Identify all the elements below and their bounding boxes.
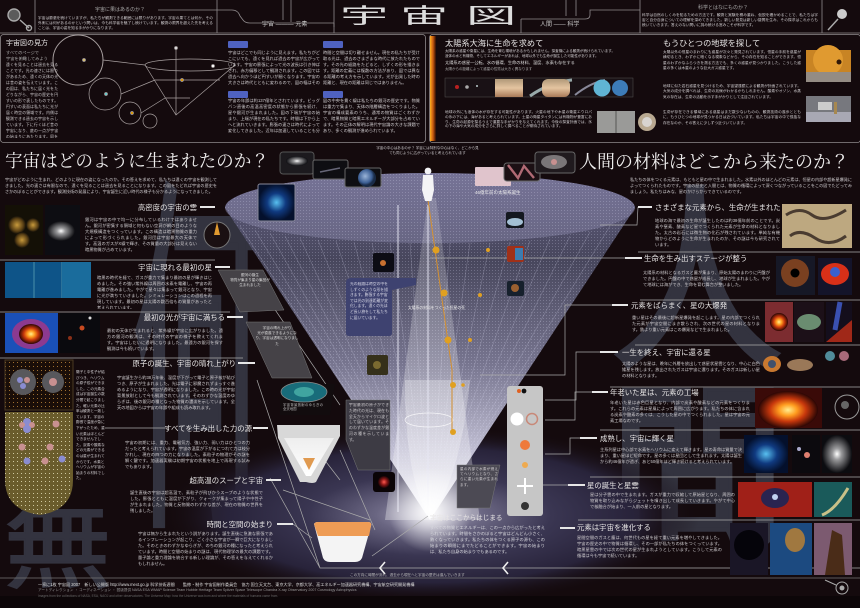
exoplanet images [806,45,851,122]
light path of orange galaxies [428,200,490,435]
particle diagram side text: 陽子と中性子が結びつき、ヘリウムの原子核ができました。この元素合成は宇宙誕生の数分間で起こりました。軽い元素の比率は観測と一致しています。宇宙の膨張で温度が急に下がったため、重い元素はほとんどできませんでした。炭素や酸素などの元素ができるのは星が生まれてからです。水素とヘリウムが宇宙の始まりの材料でした。 [76,370,105,480]
blue text box [346,278,416,336]
left row 6 text: 誕生直後の宇宙は超高温で、素粒子が飛びかうスープのような状態でした。膨張とともに温度が下がり、クォークが集まって陽子や中性子が生まれました。物質と反物質のわずかな差が、現在の物質の世界を残しました。 [130,490,263,513]
thumbnails along left column [5,205,100,353]
connector lines [0,207,860,568]
solar system subheading: 太陽系の惑星―公転、水の循環、生命の材料、温度、水素も存在する [445,60,575,65]
left row 5 bar [253,427,268,429]
human figure [422,168,434,201]
panel heading: solar system: 太陽系大海に生命を求めて [445,39,543,48]
top label: humans and science: 人間 ―― 科学 [540,22,579,28]
planets strip [445,78,633,97]
left row 7 bar [277,523,293,525]
right row 6 heading: 成熟し、宇宙に輝く星 [600,434,674,443]
title: 宇宙図: 図 [466,5,516,28]
right row 6 bar [580,437,597,439]
right row 3 heading: 元素をばらまく、星の大爆発 [631,301,727,310]
how to read subtitle: すべてのページで [6,50,39,55]
right row 7 bar [568,484,585,486]
left row 1 heading: 高密度の宇宙の雲 [138,203,197,212]
blue box text: 光の経路は時空の中をしずくのような形を描きます。膨張する宇宙では光の到達距離が変化します。遠くの光ほど長い旅をして私たちに届いています。 [350,282,388,320]
right row 4 text: 太陽のような星は、晩年に外層を放出して惑星状星雲となり、中心に白色矮星を残します。放出されたガスは宇宙に還ります。そのガスは新しい星の材料となります。 [622,361,760,378]
sun strip [430,36,436,141]
ghost calligraphy characters: 無 [4,470,112,608]
right row 4 heading: 一生を終え、宇宙に還る星 [622,348,711,357]
topic 2 text: 時間と空間は切り離せません。現在の私たちが受け取る光は、過去のさまざまな時代に放たれたものです。その光の経路をたどると、しずくの形を描きます。距離の定義には複数の方法があり、図では異なる距離の考え方を示しています。光が出発した時の距離と、現在の距離は同じではありません。 [323,50,420,85]
apex side box text: 星の内部で水素が燃えてヘリウムとなり、さらに重い元素が生まれます。 [460,467,498,487]
left row 6 bar [266,479,281,481]
top left question heading: 宇宙に果はあるのか？ [95,7,145,13]
how to read subtitle [6,50,48,61]
left row 7 text: 宇宙は無から生まれたという説があります。誕生直後に急激な膨張であるインフレーションが起こり、ごく小さな宇宙が一瞬で巨大になりました。そのときのわずかなゆらぎが、のちの銀河の種になったと考えられています。時間と空間の始まりの謎は、現代物理学の最大の課題です。量子論と重力理論を統合する新しい理論が、その答えを与えてくれるかもしれません。 [138,531,273,566]
left row 6 heading: 超高温のスープと宇宙 [190,476,263,485]
left row 4 text: 宇宙誕生から約38万年後、温度が下がって電子と原子核が結びつき、原子が生まれました。光は電子に邪魔されずまっすぐ進めるようになり、宇宙が透明になりました。この時の光が宇宙背景放射として今も観測されています。そのわずかな温度のゆらぎは、後の銀河の種となった物質の濃淡を示しています。全天の地図からは宇宙の年齢や組成も読み取れます。 [117,375,235,410]
right row 5 bar [592,391,608,393]
icon: compass [825,580,848,594]
top label: universe and elements: 宇宙 ――― 元素 [262,22,307,28]
bottom timeline arrows [380,562,508,574]
right intro text: 私たちの体をつくる元素は、もともと星の中で生まれました。水素以外のほとんどの元素は、恒星の内部や超新星爆発によってつくられたものです。宇宙の歴史と人間とは、物質の循環によって深くつながっていることをこの図でたどってみましょう。私たちはみな、星のかけらからできているのです。 [630,177,852,194]
bottom glow around the cone apex [160,425,700,605]
thumbnail: cell [535,152,575,173]
right row 8 text: 星間空間のガスと塵は、何世代もの星を経て重い元素を増やしてきました。宇宙の歴史の中で物質は循環し、その一部が私たちの体をつくっています。暗黒星雲の中では次の世代の星が生まれようとしています。こうして元素の循環は今も宇宙で続いています。 [577,535,722,558]
right column images [730,204,859,575]
microwave background sky map [280,382,335,415]
right row 2 bar [625,257,642,259]
header and panel frames [0,0,860,142]
lower trapezoid: birth of spacetime [314,522,371,562]
left intro text: 宇宙がどのように生まれ、どのように現在の姿になったのか。その答えを求めて、私たちは遠くの宇宙を観測してきました。光の速さは有限なので、遠くを見ることは過去を見ることになります。この図をたどれば宇宙の歴史をさかのぼることができます。観測技術の発展により、宇宙誕生に近い時代の様子も分かるようになってきました。 [5,177,217,194]
left row 2 heading: 宇宙に現れる最初の星 [138,263,212,272]
footer band [0,578,860,608]
top left text: 宇宙は膨張を続けていますが、私たちが観測できる範囲には限りがあります。宇宙の果てとは何か、その外側には何があるのかという問いは、今も科学者を魅了し続けています。観測の限界を超えた先を考えることは、宇宙の姿を知る手がかりになります。 [38,16,213,30]
icon: top left gears [8,9,32,30]
right row 1 text: 地球の海で最初の生命が誕生したのは約38億年前のことです。炭素や窒素、酸素など星でつくられた元素が生命の材料となりました。太古の岩石には微生物の化石が残されています。単純な有機物からどのように生命が生まれたのか、その謎は今も研究されています。 [655,218,780,247]
dark box text in cone: 宇宙最初の原子ができた時代の光は、現在も全天からマイクロ波として届いています。そのわずかな温度差が銀河の種を示しています。 [349,403,389,442]
center top caption: 宇宙の中心はあるのか？ 宇宙には特別な中心はなく、どこから見ても同じように広がっていると考えられています [376,146,479,155]
left row 3 bar [227,316,243,318]
left row 4 bar [238,362,255,364]
footer credit line: 一家に1枚 宇宙図 2007 新しい公開版 http://www.mext.go.jp 科学技術週間 監修・制作 宇宙図制作委員会 協力 国立天文台、東京大学、京都大学、高エネルギー加速器研究機構、宇宙航空研究開発機構 [38,582,414,587]
timeline caption: この方向に時間が流れ、過去から現在へと宇宙の歴史は進んでいきます [350,573,465,577]
top right question heading: 科学とはなにものか？ [698,5,748,11]
right row 1 bar [638,206,652,208]
main heading right: 人間の材料はどこから来たのか？ [579,152,849,172]
right row 3 bar [612,304,628,306]
right row 2 heading: 生命を生み出すステージが整う [644,254,747,263]
title: 宇宙図 [340,4,516,28]
left row 2 bar [215,266,230,268]
upper trapezoid: early universe [277,425,340,483]
ghost calligraphy characters: 人 [612,116,782,412]
footer credits second line: アートディレクション ・ コーディネーション ・ 図版提供 NASA ESA WMAP Science Team Hubble Heritage Team Spitzer Space Telescope Chandra X-ray Observatory 2007 Cosmology Astrophysics [38,588,356,592]
solar system sub text: 太陽からの距離によって惑星の性質は大きく異なります [445,67,532,71]
thumbnail: earth [345,168,381,187]
apex light [388,468,472,552]
cosmic web image [258,184,295,221]
left row 7 heading: 時間と空間の始まり [206,520,273,529]
top right text: 科学は自然のしくみを知るための方法です。観測と実験を積み重ね、仮説を確かめることで、私たちは宇宙と自分自身についての理解を深めてきました。新しい発見は新しい疑問を生み、その探求はこれからも続いていきます。答えのない問いに挑み続ける営みこそが科学です。 [642,13,818,27]
main heading left: 宇宙はどのように生まれたのか？ [5,151,269,171]
right row 2 text: 太陽系の材料となるガスと塵が集まり、原始太陽のまわりに円盤ができました。円盤の中で惑星が成長し、地球が生まれました。やがて地球には海ができ、生命を育む舞台が整いました。 [643,270,770,287]
cone text panel 1: 物質が集まり星の集団が生まれました [230,278,270,287]
cone labels: 46億年前の太陽系誕生 [475,190,521,195]
cone text panel 2: 宇宙の晴れ上がり [263,326,291,330]
panel heading: another earth: もうひとつの地球を探して [663,39,760,48]
left row 5 text: 宇宙の初期には、重力、電磁気力、強い力、弱い力はひとつの力だったと考えられています。宇宙の温度が下がるにつれて力は枝分かれし、現在の四つの力になりました。素粒子の物理がその謎を解く鍵です。加速器実験は初期宇宙の状態を地上で再現する試みでもあります。 [125,440,250,469]
how-to-read diagram [53,35,235,128]
thumbnail: milky way [313,160,348,179]
thumbnail: galaxy [280,152,314,174]
stellar evolution panel [507,386,543,516]
ghost calligraphy characters: 何 [132,65,261,602]
right row 8 bar [560,527,575,529]
right row 7 text: 星は分子雲の中で生まれます。ガスが重力で収縮して原始星となり、周囲の物質を取り込みながらジェットを噴き出して成長していきます。やがて中心で核融合が始まり、一人前の星となります。 [590,492,735,509]
CMB caption: 宇宙背景放射のゆらぎの全天地図 [283,403,323,411]
right row 6 text: 主系列星は中心部で水素をヘリウムに変えて輝きます。星の寿命は質量で決まり、重い星ほど短命です。星の多くは星団として生まれます。太陽は誕生から約46億年が過ぎ、あと50億年ほど輝き続けると考えられています。 [600,447,742,464]
thumbnail: DNA [504,163,540,181]
right row 5 text: 年老いた星は赤色巨星となり、内部で炭素や酸素などの元素をつくります。これらの元素は星風によって周囲に広がります。私たちの体に含まれる炭素や酸素の多くは、こうした星の中でつくられました。星は宇宙の元素工場なのです。 [610,400,750,423]
cone center caption: 太陽系の材料をつくった恒星の死 [408,306,465,310]
title: 宇宙図: 宙 [400,4,448,28]
how to read subtitle: 宇宙を俯瞰してみよう [6,56,48,61]
right row 8 heading: 元素は宇宙を進化する [577,523,651,532]
left row 3 heading: 最初の光が宇宙に満ちる [144,313,225,322]
apex text: すべての物質とエネルギーは、この一点から広がったと考えられています。時間をさかのぼると宇宙はどんどん小さく、熱くなっていきます。私たちの体をつくる原子の源も、この始まりの瞬間にまでたどることができます。宇宙の始まりは、私たち自身の始まりでもあるのです。 [430,525,545,554]
panel heading: how to read: 宇宙図の見方 [6,40,48,47]
title: 宇宙図: 宇 [340,4,388,28]
thumbnail: cell tissue [475,167,511,186]
right row 1 heading: さまざまな元素から、生命が生まれた [655,203,781,212]
footer credits third line: Images from the collections of NASA, ESA, NAOJ and other observatories. The Universe Map: how the Universe was born and where the materials of humans came from. [38,594,278,598]
blue topic labels [228,41,343,98]
cone text panel 1: 銀河の誕生 [241,273,259,277]
cone text panel 1 [230,273,270,287]
cone text panel 2: 光が直進できるようになり、宇宙は透明になりました [256,331,298,346]
solar system lower text: 地球の外にも液体の水が存在する可能性があります。火星の地下や木星の衛星エウロパの氷の下には、海があると考えられています。土星の衛星タイタンには有機物が豊富にあり、生命の起源を探るうえで重要な手がかりを与えてくれます。今後の探査計画では、氷の下の海や大気の成分をさらに詳しく調べることが期待されています。 [445,110,592,128]
left row 5 heading: すべてを生み出した力の源 [164,424,252,433]
apex heading: 宇宙はここからはじまる [430,515,503,522]
early universe particle diagram [5,360,73,515]
text panels on the cone rim [218,270,500,508]
left row 4 heading: 原子の誕生、宇宙の晴れ上がり [133,359,236,368]
right row 7 heading: 星の誕生と星雲 [587,481,639,490]
right row 3 text: 重い星はその最後に超新星爆発を起こします。星の内部でつくられた元素が宇宙空間にまき散らされ、次の世代の星の材料となります。鉄より重い元素はこの爆発などで生まれました。 [632,315,760,332]
another earth text 2: 地球に似た岩石惑星を見つけるため、宇宙望遠鏡による観測が計画されています。大気の成分を調べれば、生命の兆候がわかるかもしれません。酸素やオゾン、水蒸気の存在は、生命の活動を示す手がかりとして注目されています。 [663,84,801,99]
icon: top right orb [828,9,847,30]
another earth text 1: 太陽以外の恒星のまわりにも惑星が次々と発見されています。恒星の手前を惑星が横切るとき、わずかに暗くなる現象などから、その存在を知ることができます。恒星のわずかなふらつきを測る方法でも、多くの惑星が見つかりました。こうした惑星の多くは木星のような巨大ガス惑星です。 [663,50,801,70]
right row 4 bar [600,351,618,353]
left row 1 text: 銀河は宇宙の中で均一に分布しているわけではありません。銀河が密集する領域と何もない空洞が網の目のような大規模構造をつくっています。この構造は暗黒物質の重力によって形づくられました。銀河団は宇宙最大の天体です。高温のガスがX線で輝き、その質量の大部分は見えない暗黒物質が占めています。 [85,217,197,252]
another earth text 3: 生命が存在できる領域にある惑星はまだ数少ないものの、観測技術の進歩とともに、もうひとつの地球が見つかる日は近づいています。私たちは宇宙の中で孤独な存在なのか、その答えに少しずつ近づいています。 [663,110,801,125]
cosmic cone [225,173,635,520]
moon images [597,111,656,133]
topic 4 text: 図の中央を貫く線は私たちの銀河の歴史です。物質は重力で集まり、天体の階層構造をつくりました。宇宙の構成要素のうち、通常の物質はごくわずかで、暗黒物質と暗黒エネルギーが大部分を占めています。その正体の解明は現代宇宙論の大きな課題であり、多くの観測が進められています。 [323,98,420,133]
left row 3 text: 最初の天体が生まれると、紫外線が宇宙に広がりました。遠方の銀河の観測は、その時代の宇宙の様子を教えてくれます。宇宙はしだいに透明になりました。最遠方の銀河を探す観測は今も続いています。 [107,328,223,351]
cone thumbnails [367,212,524,492]
solar system intro: 太陽系の惑星や衛星には、生命を育む環境があるかもしれません。探査機による観測が続けられています。液体の水と有機物、そしてエネルギーがあれば、地球以外でも生命が誕生した可能性があります。 [445,49,615,58]
left row 1 bar [200,206,215,208]
dark matter circle [204,222,230,248]
ghost calligraphy characters: 間 [608,326,787,584]
right row 5 heading: 年老いた星は、元素の工場 [610,388,699,397]
